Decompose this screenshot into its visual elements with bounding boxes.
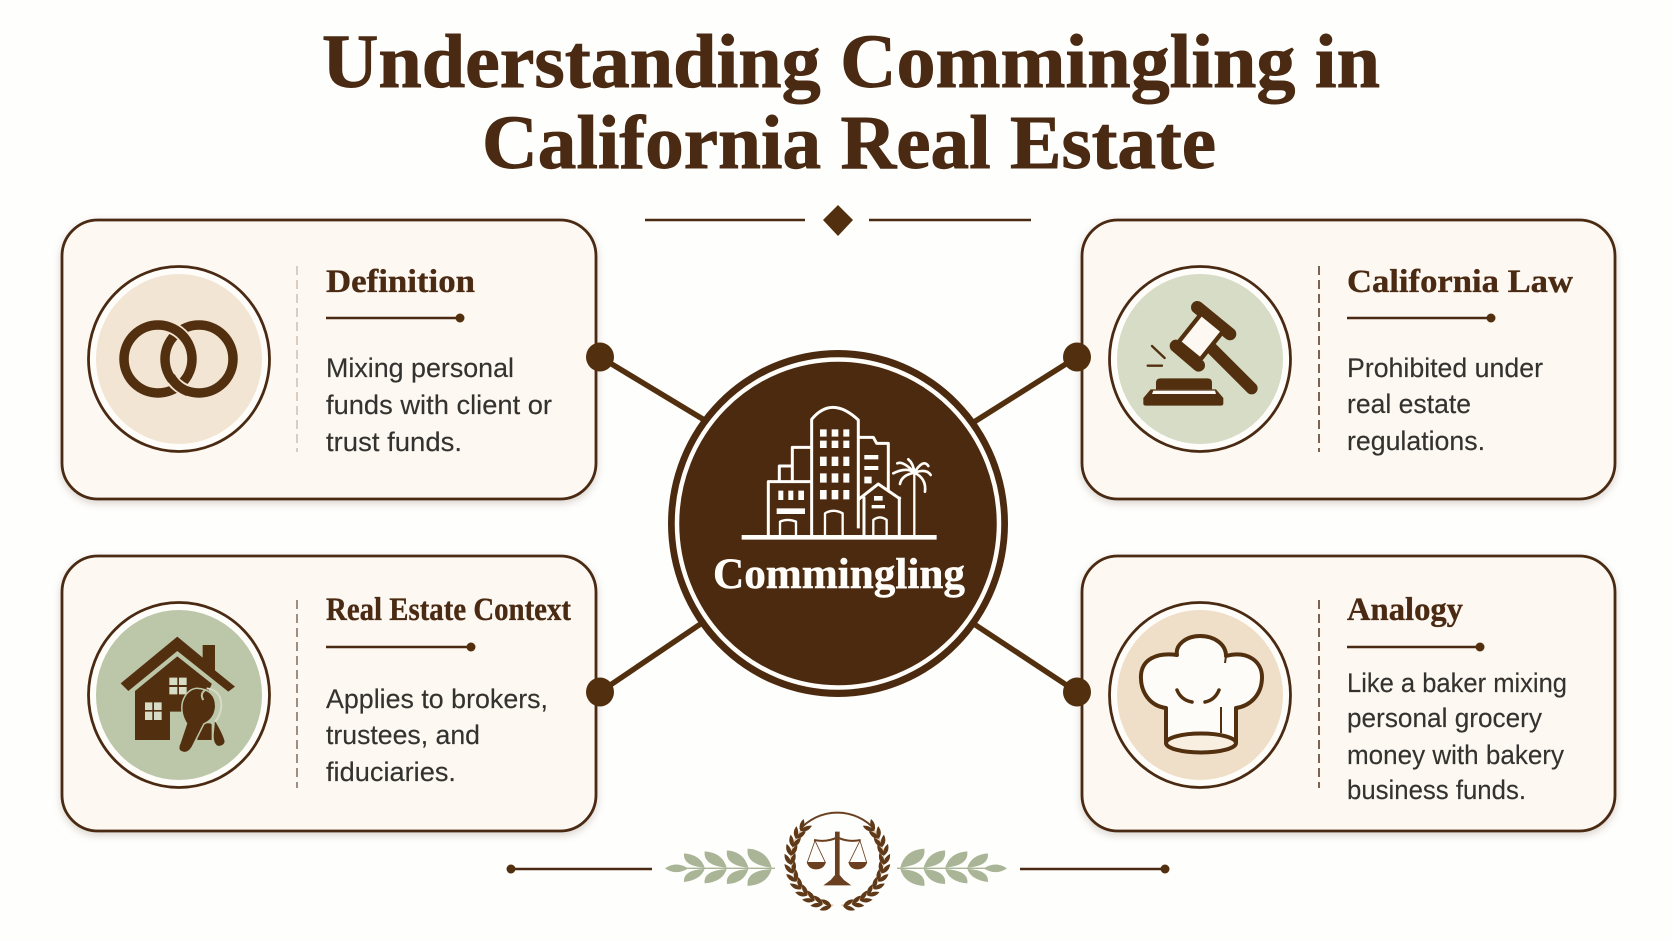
laurel wreath [784,813,890,912]
connector: real estate context to centre [586,623,702,706]
heading rule [326,314,464,322]
right olive sprig [897,849,1007,886]
icon: interlinked rings [88,266,270,452]
connector: analogy to centre [974,624,1091,706]
panel: analogy [1082,556,1615,831]
text: California law: regulations. [1347,426,1485,456]
connector: definition to centre [586,342,706,421]
icon: chef hat [1110,602,1290,788]
heading: real estate context: Real Estate Context [326,592,571,628]
footer line right [1020,864,1170,874]
text: California law: Prohibited under [1347,353,1543,383]
text: California law: real estate [1347,389,1471,419]
title: Understanding Commingling in [322,20,1380,104]
heading: definition: Definition [326,264,475,300]
text: definition: funds with client or [326,390,552,420]
text: analogy: Like a baker mixing [1347,668,1567,698]
label: commingling: Commingling [713,551,965,598]
heading: California law: California Law [1347,264,1573,300]
heading rule [1347,314,1496,322]
heading: analogy: Analogy [1347,592,1463,628]
text: definition: Mixing personal [326,353,514,383]
centre medallion: commingling [668,350,1008,697]
icon: house with keys [88,602,270,788]
text: analogy [1347,668,1567,805]
connector: California law to centre [974,342,1091,422]
text: California law [1347,353,1543,456]
title [322,20,1380,185]
scales of justice [807,832,867,885]
left olive sprig [665,849,775,886]
icon: gavel [1110,266,1290,452]
footer line left [506,864,652,874]
text: real estate context [326,684,548,787]
heading rule [1347,642,1484,652]
icon: city buildings and palm [742,407,937,537]
footer emblem: scales of justice in laurel wreath [665,813,1007,912]
text: real estate context: fiduciaries. [326,757,456,787]
text: real estate context: trustees, and [326,720,480,750]
heading rule [326,642,476,652]
panel: real estate context [62,556,596,831]
panel: California law [1082,220,1615,499]
text: analogy: money with bakery [1347,740,1564,770]
text: definition: trust funds. [326,427,462,457]
panel: definition [62,220,596,499]
text: analogy: business funds. [1347,775,1526,805]
title: California Real Estate [482,101,1216,185]
title divider with diamond [645,205,1031,236]
text: real estate context: Applies to brokers, [326,684,548,714]
text: definition [326,353,552,457]
text: analogy: personal grocery [1347,703,1542,733]
